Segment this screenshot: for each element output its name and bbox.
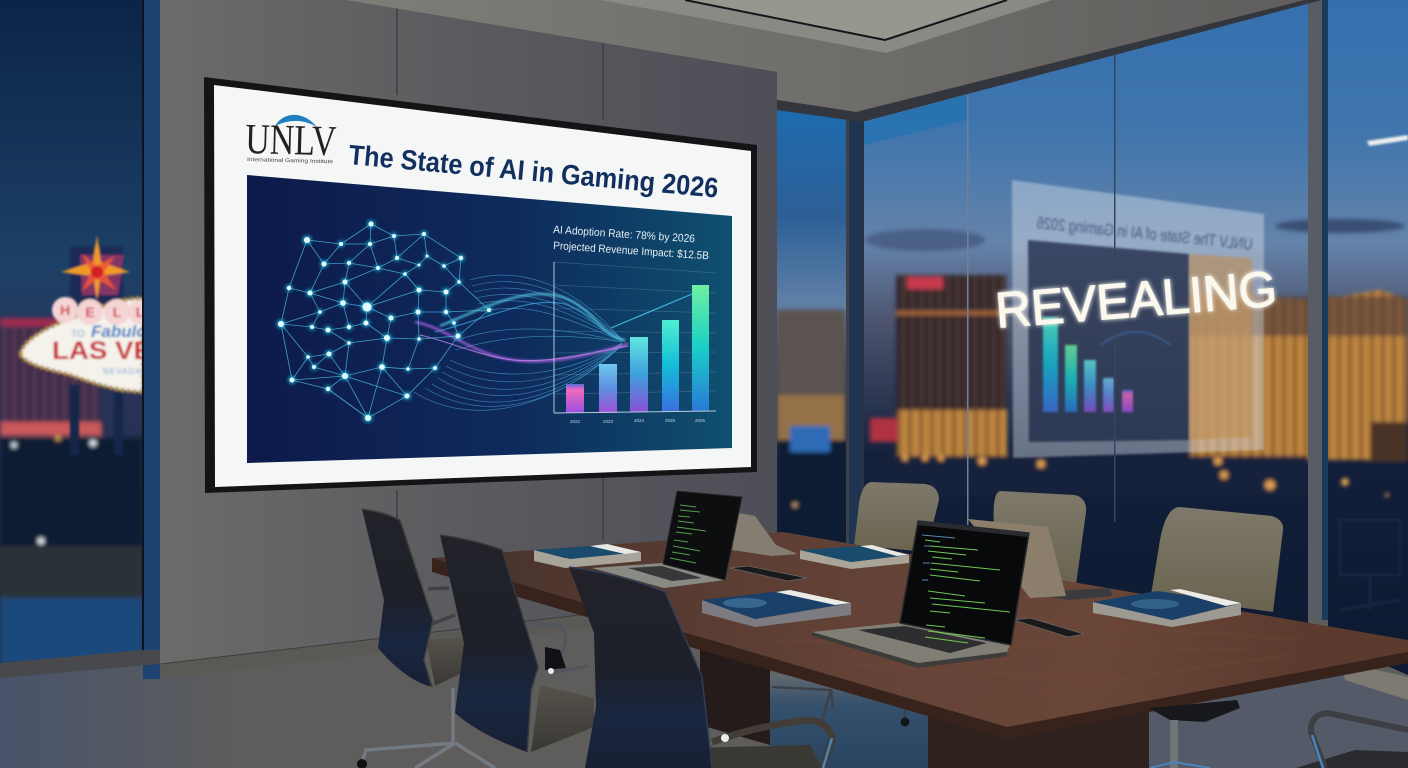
Las Vegas sign: Fabulous xyxy=(91,322,167,341)
chair: back middle xyxy=(994,491,1086,585)
seat xyxy=(531,685,594,752)
axis labels xyxy=(570,419,705,423)
chair base: under table xyxy=(772,687,905,722)
seat xyxy=(426,637,468,686)
right window glass with city view xyxy=(862,0,1408,675)
floor areas xyxy=(770,662,1408,768)
UNLV logo: International Gaming Institute xyxy=(247,157,333,165)
city buildings xyxy=(864,219,1408,497)
swivel base xyxy=(362,688,495,768)
UNLV logo: UNLV xyxy=(245,116,337,165)
chair reflections xyxy=(1340,520,1400,610)
booklet: stack centre near xyxy=(702,590,851,627)
wall xyxy=(160,0,777,679)
centre window view xyxy=(777,110,846,543)
ceiling xyxy=(345,0,1322,122)
armrest xyxy=(712,720,832,768)
reflected bar chart xyxy=(1043,317,1133,412)
axis labels: 2026 xyxy=(695,418,706,423)
Las Vegas sign: TO xyxy=(71,329,85,340)
conference table xyxy=(432,532,1408,768)
neon star xyxy=(61,235,130,300)
laptop back: middle xyxy=(968,519,1112,600)
table pedestal far xyxy=(700,640,770,745)
backrest xyxy=(569,567,712,768)
dark slide panel xyxy=(247,175,732,463)
sign posts xyxy=(70,247,123,307)
axis labels: 2024 xyxy=(634,418,645,423)
front left chair xyxy=(357,509,495,768)
HELLO circles: L xyxy=(113,304,122,320)
chart stat text: Projected Revenue Impact: $12.5B xyxy=(553,240,709,262)
glass reflection of the screen xyxy=(1012,180,1264,458)
front near chair xyxy=(569,567,832,768)
axis labels: 2023 xyxy=(603,419,614,424)
chair: far back xyxy=(854,482,939,552)
booklet: stack left xyxy=(534,544,641,568)
flowing data waves xyxy=(414,275,622,410)
backrest xyxy=(440,535,538,752)
back row chairs xyxy=(772,482,1283,726)
axis labels: 2022 xyxy=(570,419,581,424)
laptop: far with code xyxy=(592,491,742,588)
chart stat text: AI Adoption Rate: 78% by 2026 xyxy=(553,224,695,245)
left casino building xyxy=(0,318,143,664)
chart stat text xyxy=(553,226,708,260)
axis labels: 2025 xyxy=(665,418,676,423)
neural network nodes xyxy=(278,222,491,421)
table edge xyxy=(432,558,1408,739)
window mullions xyxy=(846,0,1408,620)
chart grid xyxy=(554,262,716,394)
booklet: stack centre far xyxy=(800,545,909,569)
floor xyxy=(0,600,1408,768)
arm xyxy=(529,623,589,672)
laptop back: far xyxy=(732,513,798,556)
table pedestal near xyxy=(928,680,1149,768)
Las Vegas sign xyxy=(17,235,142,456)
booklet: stack right xyxy=(1093,589,1241,627)
seat xyxy=(690,745,822,768)
title: The State of AI in Gaming 2026 xyxy=(347,139,720,204)
right chair stem under table xyxy=(1149,700,1240,768)
chair: back right xyxy=(1151,507,1283,612)
HELLO circles: L xyxy=(136,304,145,320)
Las Vegas sign: NEVADA xyxy=(103,367,141,376)
arm xyxy=(428,588,455,625)
reflected title text: UNLV The State of AI in Gaming 2026 xyxy=(1036,213,1254,254)
HELLO circles xyxy=(52,297,152,325)
table top xyxy=(432,532,1408,727)
left window mullion xyxy=(0,0,160,679)
laptop: near with code xyxy=(812,521,1029,668)
backrest xyxy=(362,509,433,687)
front middle chair xyxy=(440,535,594,752)
glowing REVEALING text on glass: REVEALING xyxy=(993,261,1279,339)
HELLO circles: H xyxy=(60,302,70,318)
bar chart xyxy=(566,285,709,413)
presentation screen xyxy=(204,77,757,493)
right foreground chair xyxy=(1296,713,1408,768)
sign body xyxy=(20,298,143,392)
HELLO circles: E xyxy=(85,304,95,320)
Las Vegas sign: LAS VEGAS xyxy=(52,337,212,365)
left window with city view xyxy=(0,0,142,663)
cable ports xyxy=(730,566,1084,637)
neural network edges xyxy=(281,224,489,418)
